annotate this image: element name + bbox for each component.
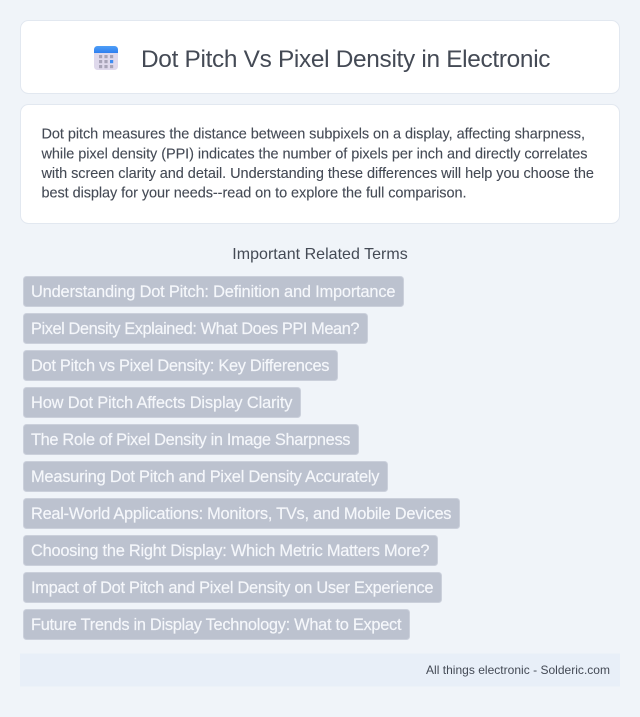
term chip 2: Pixel Density Explained: What Does PPI Mean? xyxy=(31,320,360,338)
term chip 8: Choosing the Right Display: Which Metric Matters More? xyxy=(31,542,430,560)
panel: intro text: while pixel density (PPI) indicates the number of pixels per inch and directly correlates xyxy=(40,146,588,162)
term chip 10: Future Trends in Display Technology: What to Expect xyxy=(31,616,402,634)
list: related terms xyxy=(24,276,460,640)
term chip 3 xyxy=(24,350,338,380)
panel: intro text: with screen clarity and detail. Understanding these differences will help you choose the xyxy=(40,166,594,182)
panel: intro text: Dot pitch measures the distance between subpixels on a display, affecting sharpness, xyxy=(42,126,585,142)
term chip 3: Dot Pitch vs Pixel Density: Key Differences xyxy=(31,357,330,375)
term chip 2 xyxy=(24,314,368,344)
term chip 1: Understanding Dot Pitch: Definition and Importance xyxy=(31,283,396,301)
term chip 8 xyxy=(24,536,438,566)
footer xyxy=(20,654,620,686)
panel: intro text xyxy=(20,104,620,224)
footer: All things electronic - Solderic.com xyxy=(426,663,610,677)
term chip 9: Impact of Dot Pitch and Pixel Density on User Experience xyxy=(31,579,434,597)
term chip 5 xyxy=(24,424,358,454)
heading: related terms: Important Related Terms xyxy=(232,246,408,263)
term chip 4 xyxy=(24,388,300,418)
term chip 4: How Dot Pitch Affects Display Clarity xyxy=(31,394,293,412)
term chip 1 xyxy=(24,276,404,306)
title: Dot Pitch Vs Pixel Density in Electronic xyxy=(141,46,550,73)
icon: calendar xyxy=(94,46,118,70)
panel: header xyxy=(20,20,620,94)
term chip 6 xyxy=(24,462,388,492)
term chip 9 xyxy=(24,572,442,602)
panel: intro text: best display for your needs--read on to explore the full comparison. xyxy=(42,186,466,202)
term chip 5: The Role of Pixel Density in Image Sharpness xyxy=(31,431,350,449)
term chip 10 xyxy=(24,610,410,640)
term chip 6: Measuring Dot Pitch and Pixel Density Accurately xyxy=(31,468,380,486)
term chip 7: Real-World Applications: Monitors, TVs, and Mobile Devices xyxy=(31,505,452,523)
term chip 7 xyxy=(24,498,460,528)
